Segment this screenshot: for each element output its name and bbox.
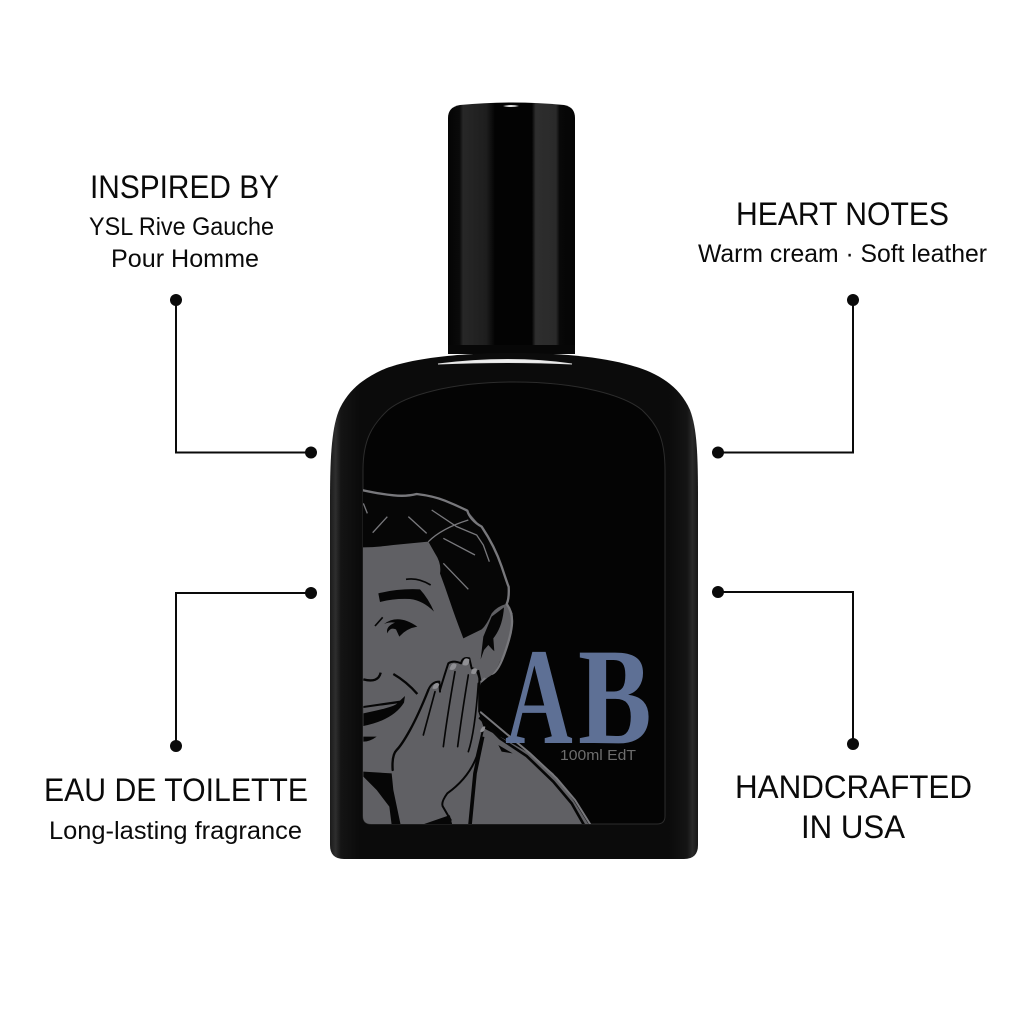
callout: eau de toilette: [44, 772, 308, 845]
label text: volume: 100ml EdT: [560, 747, 636, 764]
connector: bottom left: [170, 587, 317, 752]
callout: handcrafted: IN USA: [801, 809, 906, 845]
connector: bottom right: [712, 586, 859, 750]
shoulder highlight: [438, 360, 572, 364]
shoulder blob: [498, 745, 513, 753]
face, hand and shoulder silhouette: [360, 489, 590, 827]
callout: eau de toilette: Long-lasting fragrance: [49, 817, 302, 845]
illustration: man touching cheek: [360, 489, 591, 827]
hair outline: [362, 490, 512, 682]
label text: AB: A: [505, 620, 573, 773]
callout: inspired by: YSL Rive Gauche: [89, 213, 274, 241]
callout: heart notes: [698, 196, 987, 268]
callout: handcrafted: [735, 769, 972, 845]
bottle cap: [448, 102, 575, 354]
chin mark: [363, 737, 377, 742]
brow crease: [406, 579, 431, 585]
callout: inspired by: Pour Homme: [111, 245, 259, 273]
cheek creases: [363, 673, 417, 694]
hair: [360, 490, 509, 638]
teeth: [363, 703, 397, 713]
bottle: [330, 102, 698, 859]
callout: heart notes: Warm cream · Soft leather: [698, 240, 987, 268]
callout: handcrafted: HANDCRAFTED: [735, 769, 972, 805]
connector: top right: [712, 294, 859, 458]
bottle cap base ring: [448, 345, 575, 354]
eyebrow: [378, 589, 434, 612]
callout: inspired by: [89, 169, 279, 273]
hand outline and fingers: [392, 658, 483, 825]
connector: top left: [170, 294, 317, 458]
ear interior: [484, 650, 500, 678]
bottle body: [330, 353, 698, 859]
collar line: [470, 737, 483, 825]
bottle cap highlights: [503, 105, 522, 351]
label text: AB: [505, 620, 652, 774]
callout: eau de toilette: EAU DE TOILETTE: [44, 772, 308, 808]
mouth: [363, 696, 405, 726]
collar wedge: [363, 772, 401, 825]
shoulder edge: [480, 712, 591, 825]
callout: inspired by: INSPIRED BY: [90, 169, 279, 205]
label text: AB: B: [578, 622, 652, 774]
eye: [375, 617, 417, 637]
callout: heart notes: HEART NOTES: [736, 196, 949, 232]
ear shadow: [481, 607, 504, 659]
bottle label: [360, 382, 665, 827]
ear to jaw line: [478, 670, 481, 681]
hair highlights: [363, 503, 489, 589]
fingernails: [432, 658, 485, 732]
